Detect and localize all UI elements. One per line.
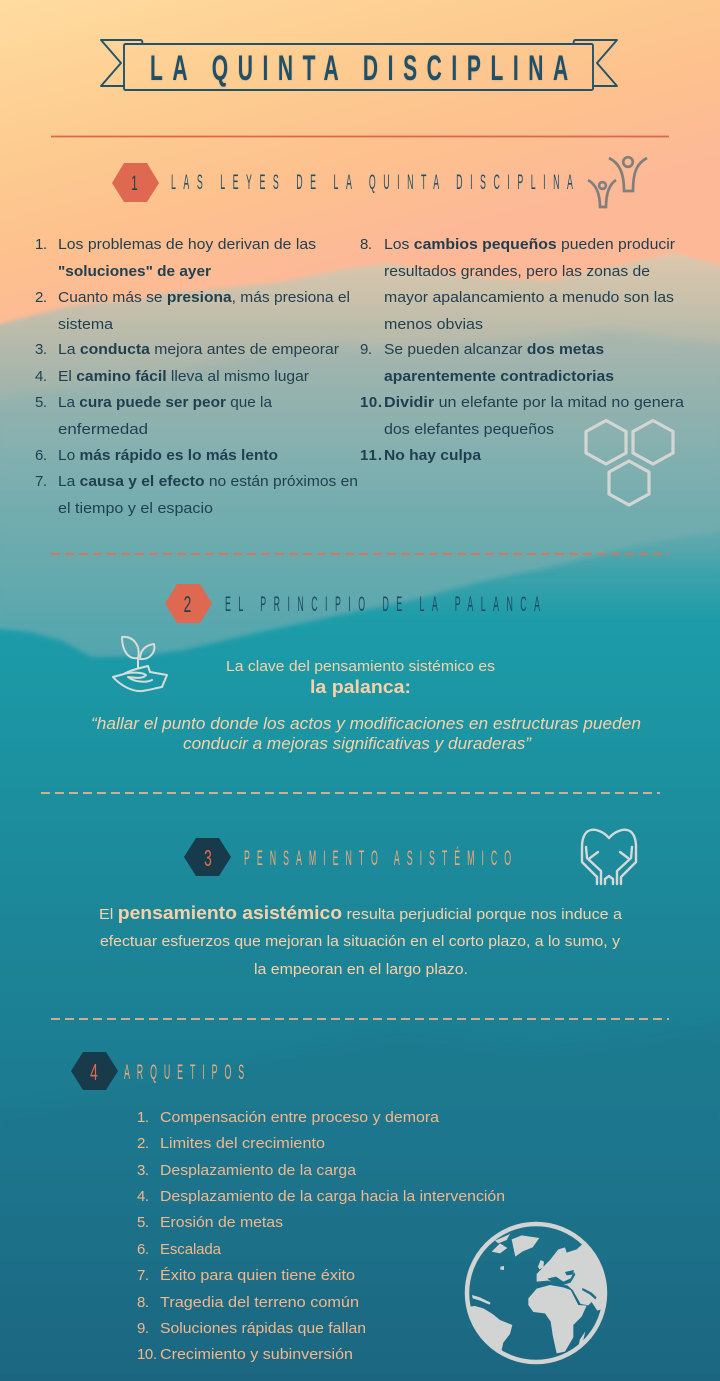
laws list: right column: 10. <box>360 394 382 411</box>
archetypes list: 8. <box>137 1294 149 1311</box>
section 2: heading <box>165 584 540 623</box>
archetypes list: 2. <box>137 1135 149 1152</box>
quote <box>91 715 641 753</box>
hexagon 3 <box>184 838 231 876</box>
laws list: left column: Los problemas de hoy derivan de las <box>58 236 316 253</box>
archetypes list: Crecimiento y subinversión <box>160 1346 353 1363</box>
archetypes list: 1. <box>137 1109 149 1126</box>
laws list: right column <box>360 236 685 464</box>
archetypes list: Limites del crecimiento <box>160 1135 325 1152</box>
laws list: left column: Cuanto más se presiona, más presiona el <box>58 289 350 306</box>
icon: globe <box>463 1224 617 1362</box>
heading text: LAS LEYES DE LA QUINTA DISCIPLINA <box>171 171 573 194</box>
archetypes list: Escalada <box>160 1241 222 1258</box>
laws list: right column: mayor apalancamiento a menudo son las <box>384 289 674 306</box>
paragraph: pensamiento asistémico: El pensamiento asistémico resulta perjudicial porque nos induce a <box>99 903 623 923</box>
laws list: right column: Se pueden alcanzar dos metas <box>384 341 604 358</box>
laws list: left column: La cura puede ser peor que la <box>58 394 273 411</box>
laws list: left column: La conducta mejora antes de empeorar <box>58 341 339 358</box>
hexagon 2 <box>165 584 212 623</box>
archetypes list <box>137 1109 505 1363</box>
hexagon 4: 4 <box>90 1061 98 1086</box>
archetypes list: 5. <box>137 1214 149 1231</box>
laws list: right column: 9. <box>360 341 372 358</box>
laws list: left column: El camino fácil lleva al mismo lugar <box>58 368 309 385</box>
principle text <box>91 658 641 753</box>
divider <box>51 136 669 138</box>
laws list: right column: No hay culpa <box>384 447 482 464</box>
laws list: left column: 3. <box>35 341 47 358</box>
archetypes list: Éxito para quien tiene éxito <box>160 1267 355 1284</box>
archetypes list: 3. <box>137 1162 149 1179</box>
laws list: left column <box>35 236 358 517</box>
intro: La clave del pensamiento sistémico es <box>226 658 495 675</box>
heading text: ARQUETIPOS <box>124 1061 244 1084</box>
hexagon 1 <box>112 163 159 202</box>
archetypes list: 10. <box>137 1346 157 1363</box>
hexagon 3: 3 <box>204 847 212 872</box>
hexagon 4 <box>71 1052 118 1090</box>
title text: LA QUINTA DISCIPLINA <box>150 50 568 88</box>
archetypes list: Desplazamiento de la carga hacia la intervención <box>160 1188 505 1205</box>
laws list: right column: Los cambios pequeños pueden producir <box>384 236 675 253</box>
laws list: left column: 4. <box>35 368 47 385</box>
archetypes list: 4. <box>137 1188 149 1205</box>
laws list: right column: menos obvias <box>384 316 483 333</box>
archetypes list: 9. <box>137 1320 149 1337</box>
hexagon 2: 2 <box>184 593 191 618</box>
laws list: left column: 7. <box>35 473 47 490</box>
icon: hexagons <box>586 420 673 505</box>
emphasis: la palanca: <box>310 677 411 697</box>
archetypes list: 7. <box>137 1267 149 1284</box>
laws list: left column: 1. <box>35 236 47 253</box>
quote: conducir a mejoras significativas y duraderas” <box>183 735 533 753</box>
laws list: left column: el tiempo y el espacio <box>58 500 213 517</box>
laws list: right column: dos elefantes pequeños <box>384 421 554 438</box>
quote: “hallar el punto donde los actos y modificaciones en estructuras pueden <box>91 715 641 733</box>
dashed divider <box>41 792 660 794</box>
heading text: EL PRINCIPIO DE LA PALANCA <box>225 593 540 616</box>
title banner <box>101 40 617 90</box>
ribbon <box>101 40 617 90</box>
laws list: right column: 11. <box>360 447 382 464</box>
laws list: right column: Dividir un elefante por la mitad no genera <box>384 394 685 411</box>
archetypes list: Desplazamiento de la carga <box>160 1162 357 1179</box>
archetypes list: Compensación entre proceso y demora <box>160 1109 440 1126</box>
title text: LA QUINTA DISCIPLINA <box>150 50 568 88</box>
laws list: left column: "soluciones" de ayer <box>58 263 211 280</box>
archetypes list: 6. <box>137 1241 149 1258</box>
hexagon 1: 1 <box>131 171 138 195</box>
laws list: right column: 8. <box>360 236 372 253</box>
laws list: left column: 2. <box>35 289 47 306</box>
paragraph: pensamiento asistémico: efectuar esfuerzos que mejoran la situación en el corto plazo, a lo sumo, y <box>100 933 621 950</box>
section 1: heading <box>112 163 573 202</box>
icon: plant in hand <box>113 637 167 691</box>
dashed divider <box>51 553 669 555</box>
heading text: PENSAMIENTO ASISTÉMICO <box>244 845 511 870</box>
archetypes list: Soluciones rápidas que fallan <box>160 1320 366 1337</box>
dashed divider <box>51 1018 669 1020</box>
archetypes list: Erosión de metas <box>160 1214 283 1231</box>
laws list: left column: enfermedad <box>58 421 148 438</box>
section 4: heading <box>71 1052 244 1090</box>
laws list: right column: aparentemente contradictorias <box>384 368 614 385</box>
laws list: left column: Lo más rápido es lo más lento <box>58 447 278 464</box>
icon: hands holding heart <box>582 830 636 884</box>
laws list: left column: 5. <box>35 394 47 411</box>
section 3: heading <box>184 838 511 876</box>
laws list: left column: La causa y el efecto no están próximos en <box>58 473 358 490</box>
archetypes list: Tragedia del terreno común <box>160 1294 359 1311</box>
laws list: left column: 6. <box>35 447 47 464</box>
paragraph: pensamiento asistémico <box>99 903 623 978</box>
laws list: right column: resultados grandes, pero las zonas de <box>384 263 650 280</box>
paragraph: pensamiento asistémico: la empeoran en el largo plazo. <box>254 961 468 978</box>
laws list: left column: sistema <box>58 316 114 333</box>
icon: people <box>588 157 647 207</box>
